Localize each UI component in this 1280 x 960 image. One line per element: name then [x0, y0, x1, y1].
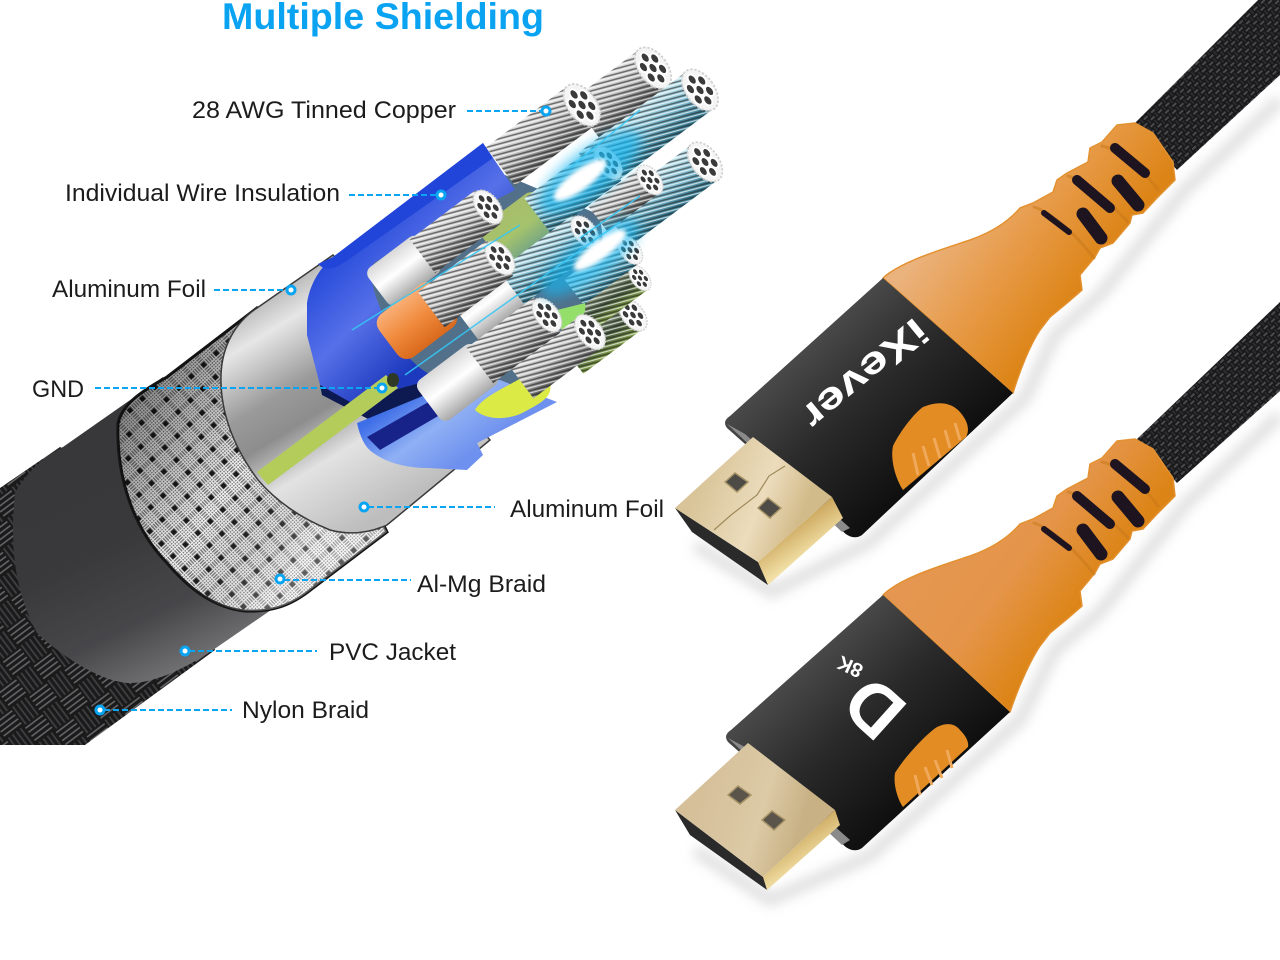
relief slots — [1044, 464, 1145, 554]
orange grip — [895, 724, 968, 807]
gold plug top — [675, 743, 835, 877]
gold plug side — [763, 810, 840, 890]
label: Individual Wire Insulation: Individual Wire Insulation — [65, 180, 340, 207]
label: Aluminum Foil lower — [360, 496, 664, 523]
housing mouth — [727, 424, 850, 532]
plug seam — [714, 466, 785, 530]
plug windows — [728, 786, 785, 830]
wire J — [564, 231, 648, 305]
orange boot and strain relief — [883, 439, 1175, 712]
copper wire strands — [364, 41, 729, 424]
relief ribs — [1034, 146, 1158, 258]
inner bundle backing — [360, 175, 610, 405]
metal housing — [726, 595, 1010, 850]
GND green drain wire — [257, 373, 399, 485]
label: GND: GND — [32, 376, 84, 403]
8K logo: 8K — [834, 650, 867, 681]
wire K — [559, 261, 656, 344]
label: Aluminum Foil upper: Aluminum Foil — [52, 276, 206, 303]
relief slots — [1044, 148, 1145, 238]
braided cable — [1137, 302, 1280, 483]
relief ribs — [1034, 462, 1158, 574]
wire E — [604, 136, 729, 246]
wire H with white sheath — [452, 208, 607, 340]
plug opening — [675, 810, 767, 890]
wire B — [486, 77, 608, 186]
label: Al-Mg Braid: Al-Mg Braid — [417, 571, 546, 598]
wire N with white sheath — [414, 288, 571, 424]
wire C — [578, 63, 726, 190]
label: Aluminum Foil upper — [52, 276, 295, 303]
metal housing — [725, 278, 1013, 537]
orange boot and strain relief — [883, 123, 1175, 393]
PVC jacket layer — [13, 377, 300, 683]
lower blue insulation shell — [357, 380, 557, 470]
blue energy glow — [352, 110, 653, 375]
wire M — [510, 309, 612, 399]
drop shadow — [695, 100, 1280, 592]
wire I with orange sheath — [372, 230, 525, 364]
wire L — [562, 294, 653, 375]
orange grip — [892, 403, 968, 490]
label: Al-Mg Braid — [276, 571, 546, 598]
nylon braid layer — [0, 447, 215, 745]
DP logo: D — [829, 660, 921, 754]
label: Nylon Braid: Nylon Braid — [242, 697, 369, 724]
yellow sheath — [475, 376, 550, 418]
upper blue wire insulation shell — [307, 143, 515, 420]
drop shadow — [695, 415, 1280, 900]
outer aluminum foil layer — [221, 255, 490, 533]
label: Aluminum Foil lower: Aluminum Foil — [510, 496, 664, 523]
wire D — [524, 139, 630, 234]
plug opening — [675, 508, 768, 585]
upper DisplayPort connector — [675, 0, 1280, 592]
green sheath — [477, 188, 563, 270]
gold plug side — [758, 497, 843, 585]
grip ridges — [913, 423, 960, 475]
plug windows — [725, 473, 781, 518]
wire F — [588, 160, 668, 233]
cable cross-section illustration — [0, 41, 729, 745]
housing mouth — [728, 738, 850, 845]
gold plug top — [675, 437, 832, 562]
Al-Mg braid layer — [118, 308, 387, 611]
braided cable — [1135, 0, 1280, 170]
light green sheath — [555, 303, 585, 330]
label: PVC Jacket — [181, 639, 456, 666]
lower DisplayPort connector — [675, 302, 1280, 900]
grip ridges — [915, 750, 952, 795]
logo iXever: iXever — [793, 309, 936, 437]
label: 28 AWG Tinned Copper: 28 AWG Tinned Copper — [192, 97, 456, 124]
label: Nylon Braid — [96, 697, 369, 724]
wire G with white sheath — [364, 182, 511, 308]
wire A — [571, 41, 679, 138]
label: PVC Jacket: PVC Jacket — [329, 639, 456, 666]
label: GND — [32, 376, 386, 403]
